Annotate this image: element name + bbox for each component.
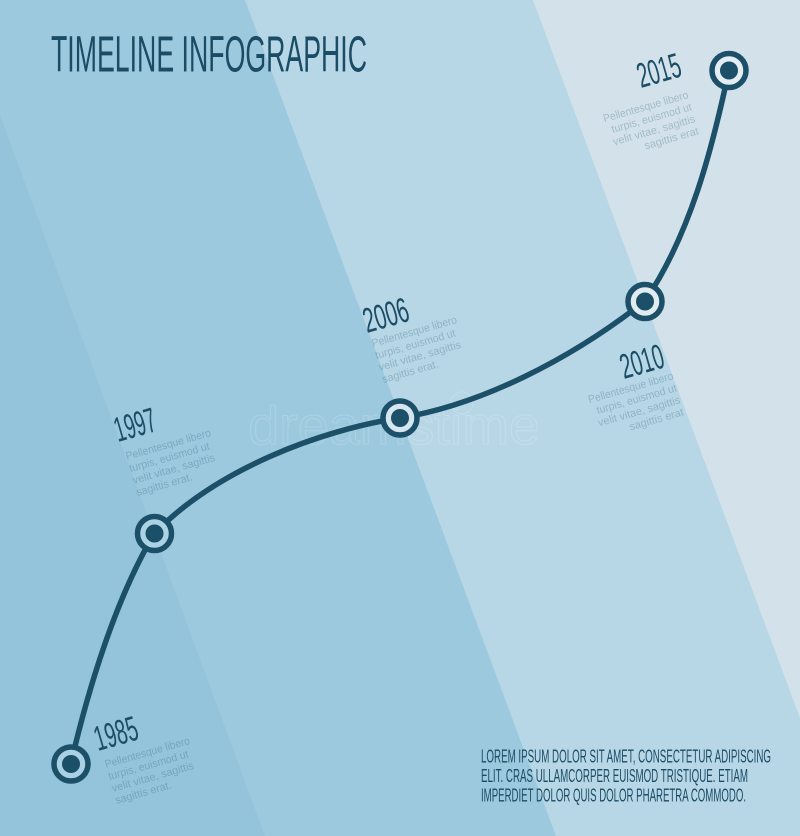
- description: Pellentesque libero: [587, 370, 675, 406]
- marker: 2010: [628, 284, 662, 318]
- description: turpis, euismod ut: [610, 101, 693, 136]
- year: 2006: [358, 291, 413, 341]
- description: Pellentesque libero: [104, 735, 191, 771]
- marker: 1985: [54, 747, 88, 781]
- description: velit vitae, sagittis: [612, 113, 697, 148]
- description: sagittis erat: [643, 125, 700, 152]
- marker: 2006: [383, 401, 417, 435]
- label: 2010: [587, 337, 686, 442]
- description: turpis, euismod ut: [107, 748, 190, 783]
- description: velit vitae, sagittis: [131, 452, 217, 487]
- title: TIMELINE INFOGRAPHIC: [51, 26, 367, 82]
- description: [602, 89, 701, 161]
- label: 2015: [602, 46, 701, 161]
- description: sagittis erat.: [114, 779, 173, 807]
- description: turpis, euismod ut: [128, 440, 211, 475]
- label: 2006: [358, 291, 469, 386]
- description: sagittis erat.: [381, 358, 440, 386]
- year: 1997: [109, 401, 161, 450]
- description: Pellentesque libero: [125, 427, 212, 463]
- year: 2010: [615, 337, 669, 387]
- watermark: dreamstime: [248, 396, 540, 456]
- description: sagittis erat: [628, 406, 685, 433]
- description: [371, 314, 469, 386]
- label: 1997: [109, 401, 223, 499]
- description: turpis, euismod ut: [595, 382, 678, 417]
- year: 2015: [632, 46, 686, 96]
- description: sagittis erat.: [135, 471, 194, 499]
- marker: 2015: [712, 54, 746, 88]
- description: velit vitae, sagittis: [597, 394, 682, 429]
- description: turpis, euismod ut: [374, 327, 457, 362]
- description: [104, 735, 202, 807]
- timeline curve: [71, 70, 729, 763]
- year: 1985: [89, 709, 143, 759]
- label: 1985: [89, 709, 202, 807]
- description: velit vitae, sagittis: [110, 760, 196, 795]
- description: [125, 427, 223, 499]
- description: velit vitae, sagittis: [377, 339, 463, 374]
- description: [587, 370, 686, 442]
- description: Pellentesque libero: [602, 89, 690, 125]
- body text: [481, 746, 771, 806]
- description: Pellentesque libero: [371, 314, 458, 350]
- marker: 1997: [138, 516, 172, 550]
